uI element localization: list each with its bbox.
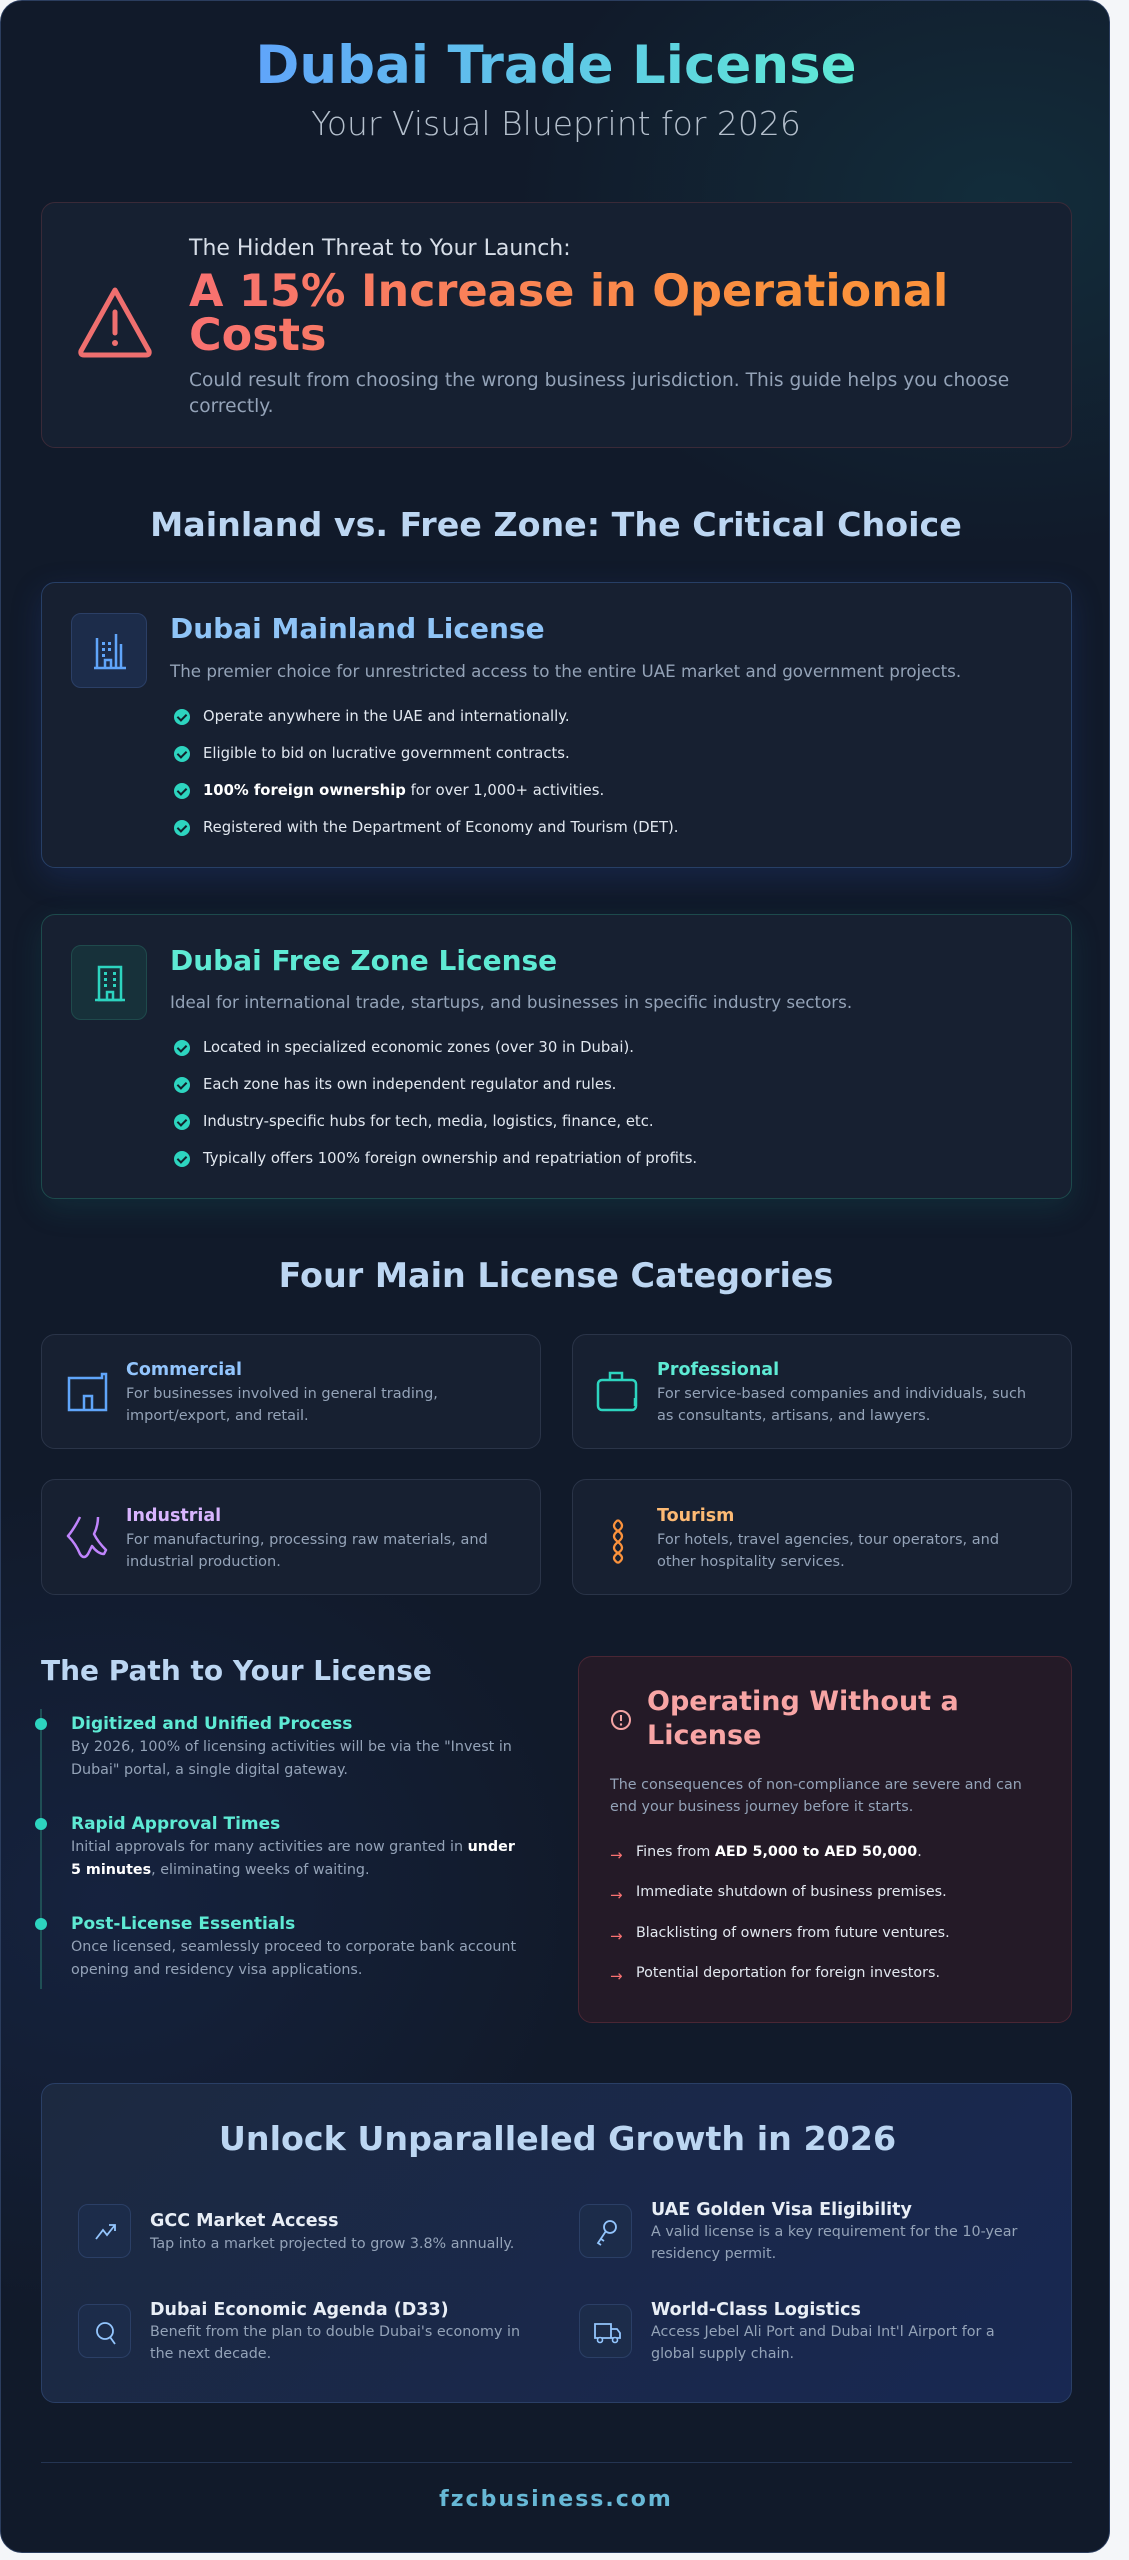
- timeline: Post-License Essentials: [71, 1914, 295, 1934]
- timeline: Once licensed, seamlessly proceed to corporate bank account opening and residency visa applications.: [71, 1939, 516, 1978]
- item: golden visa: A valid license is a key requirement for the 10-year residency permit.: [651, 2224, 1017, 2262]
- warning bullets: [610, 1844, 950, 1985]
- panel: mainland: [41, 582, 1072, 868]
- panel: operating without license: [578, 1656, 1072, 2023]
- mainland bullets: [174, 708, 678, 836]
- warning bullets: →: [610, 1846, 623, 1864]
- warning bullets: →: [610, 1886, 623, 1904]
- commercial text: Commercial: [126, 1360, 242, 1380]
- mainland bullets: 100% foreign ownership for over 1,000+ activities.: [203, 782, 604, 799]
- item: logistics: Access Jebel Ali Port and Dubai Int'l Airport for a global supply chain.: [651, 2324, 995, 2362]
- warning bullets: →: [610, 1967, 623, 1985]
- item: D33: Dubai Economic Agenda (D33): [150, 2300, 449, 2320]
- free zone desc: Ideal for international trade, startups, and businesses in specific industry sectors.: [170, 992, 852, 1012]
- icon: city: [71, 613, 147, 688]
- mainland desc: The premier choice for unrestricted access to the entire UAE market and government projects.: [170, 661, 961, 681]
- timeline: [35, 1709, 516, 1989]
- mainland title: Dubai Mainland License: [170, 612, 545, 645]
- threat headline: A 15% Increase in Operational Costs: [189, 266, 948, 361]
- warning title: Operating Without a License: [647, 1686, 959, 1751]
- step 1: [35, 1718, 47, 1730]
- timeline: Rapid Approval Times: [71, 1814, 280, 1834]
- panel: industrial: [41, 1479, 541, 1595]
- timeline: Initial approvals for many activities are now granted in under: [71, 1839, 515, 1855]
- tourism text: Tourism: [657, 1506, 734, 1526]
- timeline: 5 minutes, eliminating weeks of waiting.: [71, 1862, 370, 1878]
- item: GCC: GCC Market Access: [150, 2211, 338, 2231]
- panel: commercial: For businesses involved in general trading, import/export, and retail.: [126, 1386, 438, 1424]
- icon: alert circle: [611, 1710, 631, 1730]
- subtitle: Your Visual Blueprint for 2026: [311, 104, 801, 143]
- free zone title: Dubai Free Zone License: [170, 944, 557, 977]
- panel: threat: [41, 202, 1072, 448]
- panel: tourism: For hotels, travel agencies, tour operators, and other hospitality services.: [657, 1532, 999, 1570]
- heading: path: The Path to Your License: [41, 1654, 432, 1687]
- mainland bullets: Eligible to bid on lucrative government contracts.: [203, 745, 570, 762]
- warning bullets: →: [610, 1927, 623, 1945]
- panel: growth: [41, 2083, 1072, 2403]
- heading: mainland vs free zone: Mainland vs. Free Zone: The Critical Choice: [150, 505, 962, 544]
- timeline: Digitized and Unified Process: [71, 1714, 352, 1734]
- icon: building: [71, 945, 147, 1020]
- item: D33: Benefit from the plan to double Dubai's economy in the next decade.: [150, 2324, 520, 2362]
- icon: briefcase: [596, 1372, 638, 1412]
- footer: fzcbusiness.com: [439, 2487, 673, 2512]
- free zone bullets: [174, 1039, 697, 1167]
- item: GCC: Tap into a market projected to grow 3.8% annually.: [150, 2236, 514, 2252]
- step 2: [35, 1818, 47, 1830]
- title: Dubai Trade License: [255, 35, 857, 96]
- mainland bullets: Registered with the Department of Economy and Tourism (DET).: [203, 819, 678, 836]
- heading: four categories: Four Main License Categories: [279, 1256, 833, 1295]
- item: logistics: [579, 2300, 995, 2362]
- free zone bullets: Industry-specific hubs for tech, media, logistics, finance, etc.: [203, 1113, 654, 1130]
- icon: store: [68, 1372, 108, 1412]
- item: golden visa: [579, 2200, 1018, 2262]
- warning desc: The consequences of non-compliance are severe and can end your business journey before it starts.: [610, 1777, 1022, 1815]
- professional text: Professional: [657, 1360, 779, 1380]
- panel: tourism: [572, 1479, 1072, 1595]
- panel: commercial: [41, 1334, 541, 1449]
- icon: factory: [66, 1516, 108, 1558]
- growth heading: Unlock Unparalleled Growth in 2026: [219, 2119, 896, 2158]
- panel: industrial: For manufacturing, processing raw materials, and industrial production.: [126, 1532, 488, 1570]
- timeline: By 2026, 100% of licensing activities will be via the "Invest in Dubai" portal, a single digital gateway.: [71, 1739, 512, 1778]
- threat label: The Hidden Threat to Your Launch:: [189, 236, 571, 261]
- warning bullets: Blacklisting of owners from future ventures.: [636, 1925, 950, 1941]
- item: GCC: [78, 2204, 514, 2258]
- free zone bullets: Each zone has its own independent regulator and rules.: [203, 1076, 616, 1093]
- icon: warning triangle: [78, 288, 152, 358]
- threat description: Could result from choosing the wrong business jurisdiction. This guide helps you choose correctly.: [189, 370, 1009, 417]
- free zone bullets: Typically offers 100% foreign ownership and repatriation of profits.: [203, 1150, 697, 1167]
- item: golden visa: UAE Golden Visa Eligibility: [651, 2200, 912, 2220]
- item: logistics: World-Class Logistics: [651, 2300, 861, 2320]
- item: D33: [78, 2300, 520, 2362]
- panel: professional: For service-based companies and individuals, such as consultants, artisans, and lawyers.: [657, 1386, 1026, 1424]
- panel: free zone: [41, 914, 1072, 1199]
- warning bullets: Potential deportation for foreign investors.: [636, 1965, 940, 1981]
- panel: professional: [572, 1334, 1072, 1449]
- icon: helix: [612, 1519, 624, 1564]
- mainland bullets: Operate anywhere in the UAE and internationally.: [203, 708, 570, 725]
- warning bullets: Fines from AED 5,000 to AED 50,000.: [636, 1844, 922, 1860]
- free zone bullets: Located in specialized economic zones (over 30 in Dubai).: [203, 1039, 634, 1056]
- step 3: [35, 1918, 47, 1930]
- warning bullets: Immediate shutdown of business premises.: [636, 1884, 947, 1900]
- industrial text: Industrial: [126, 1506, 221, 1526]
